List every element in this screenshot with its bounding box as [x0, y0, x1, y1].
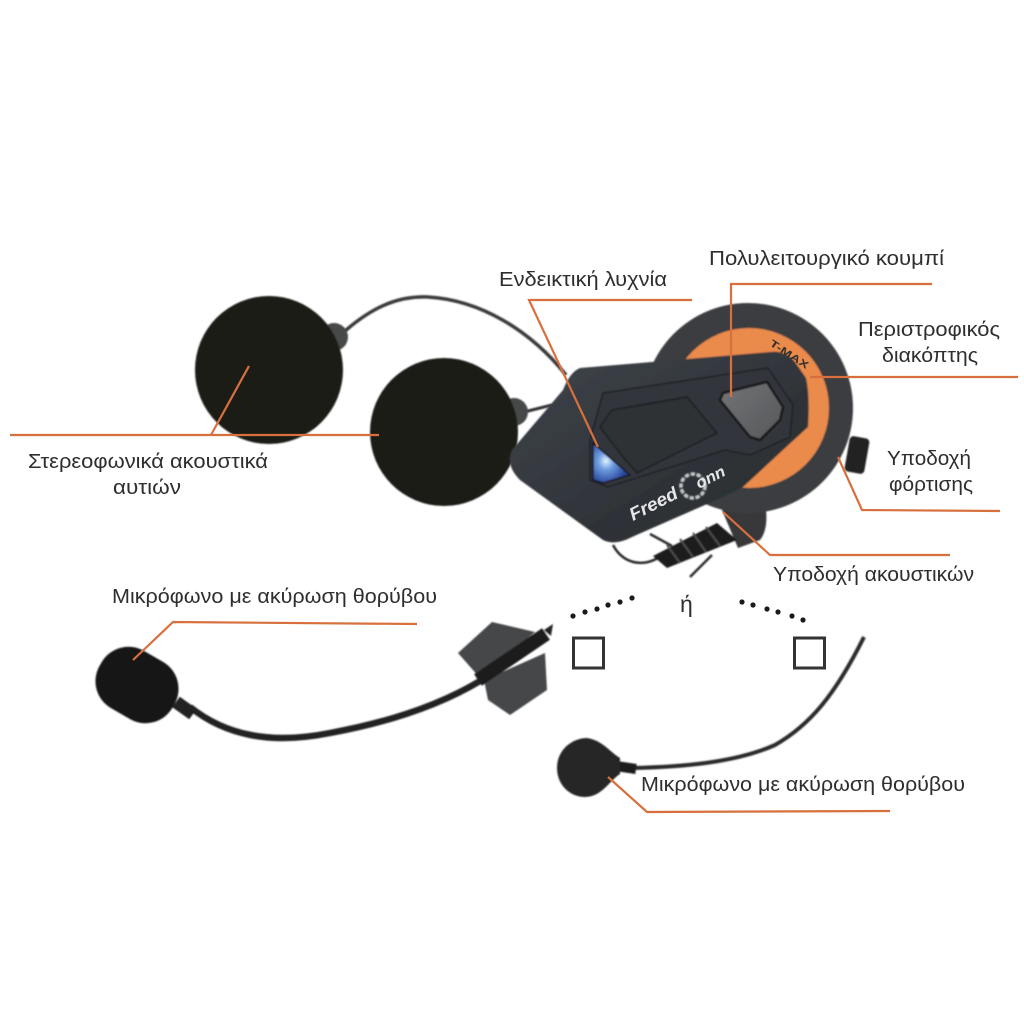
mount tube: [478, 634, 546, 680]
label: earphone port: Υποδοχή ακουστικών: [773, 564, 974, 586]
leader: boom mic: [133, 622, 417, 660]
cable connector: [653, 523, 737, 568]
left earphone foam: [195, 296, 343, 444]
earphone wire: [345, 297, 566, 375]
second earphone wire: [524, 405, 552, 412]
charging port knob: [844, 436, 870, 474]
mic button: [557, 738, 620, 797]
dots right: [739, 599, 806, 623]
label: charging port line 1: Υποδοχή: [887, 448, 971, 470]
leader: rotary switch: [810, 376, 1018, 378]
label: LED: Ενδεικτική λυχνία: [499, 269, 667, 291]
leader: earphone port: [723, 512, 950, 555]
wired microphone: [557, 637, 864, 797]
LED indicator: [593, 443, 630, 483]
label: rotary switch line 2: διακόπτης: [882, 345, 978, 367]
device body: [510, 352, 809, 542]
label: boom mic: Μικρόφωνο με ακύρωση θορύβου: [112, 586, 437, 608]
mounting plate lower wing: [484, 653, 547, 715]
checkbox left: [574, 638, 604, 668]
leader: wired mic: [608, 777, 890, 812]
leader lines: [10, 284, 1018, 812]
brand logo right: onn: [693, 463, 729, 493]
label: charging port line 2: φόρτισης: [889, 474, 973, 496]
mounting plate upper wing: [458, 622, 535, 678]
gear logo: [681, 474, 705, 498]
mic foam: [84, 635, 190, 735]
mic collar: [176, 702, 193, 714]
right earphone connector: [500, 398, 528, 426]
label: multifunction button: Πολυλειτουργικό κουμπί: [709, 248, 945, 270]
label: wired mic: Μικρόφωνο με ακύρωση θορύβου: [641, 774, 965, 796]
label: or: ή: [680, 591, 693, 617]
left earphone connector: [320, 323, 348, 351]
mic neck: [616, 766, 636, 769]
orange ring: [669, 328, 829, 488]
stereo earphones: [195, 296, 566, 506]
boom arm: [190, 681, 480, 738]
rotary dial outer: [643, 303, 853, 513]
leader: earphones: [10, 366, 379, 435]
boom microphone: [84, 622, 553, 738]
dots left: [570, 595, 635, 619]
label: earphones line 1: Στερεοφωνικά ακουστικά: [28, 451, 268, 473]
multifunction button: [720, 382, 783, 440]
connector ridges: [667, 527, 720, 563]
checkbox right: [794, 638, 824, 668]
inner panel outline: [590, 368, 793, 487]
model label: T-MAX: [767, 338, 811, 372]
brand logo left: Freed: [626, 483, 682, 525]
leader: button: [731, 284, 932, 397]
leader: LED: [529, 300, 692, 447]
label: earphones line 2: αυτιών: [113, 477, 181, 499]
left panel: [600, 397, 717, 473]
intercom device: [510, 303, 870, 577]
cable wires: [613, 534, 712, 577]
rear hub: [722, 510, 766, 548]
mic wire: [632, 637, 864, 768]
mount tip: [544, 624, 553, 636]
right earphone foam: [370, 358, 518, 506]
label: rotary switch line 1: Περιστροφικός: [858, 319, 1000, 341]
leader: charging port: [838, 457, 1000, 511]
